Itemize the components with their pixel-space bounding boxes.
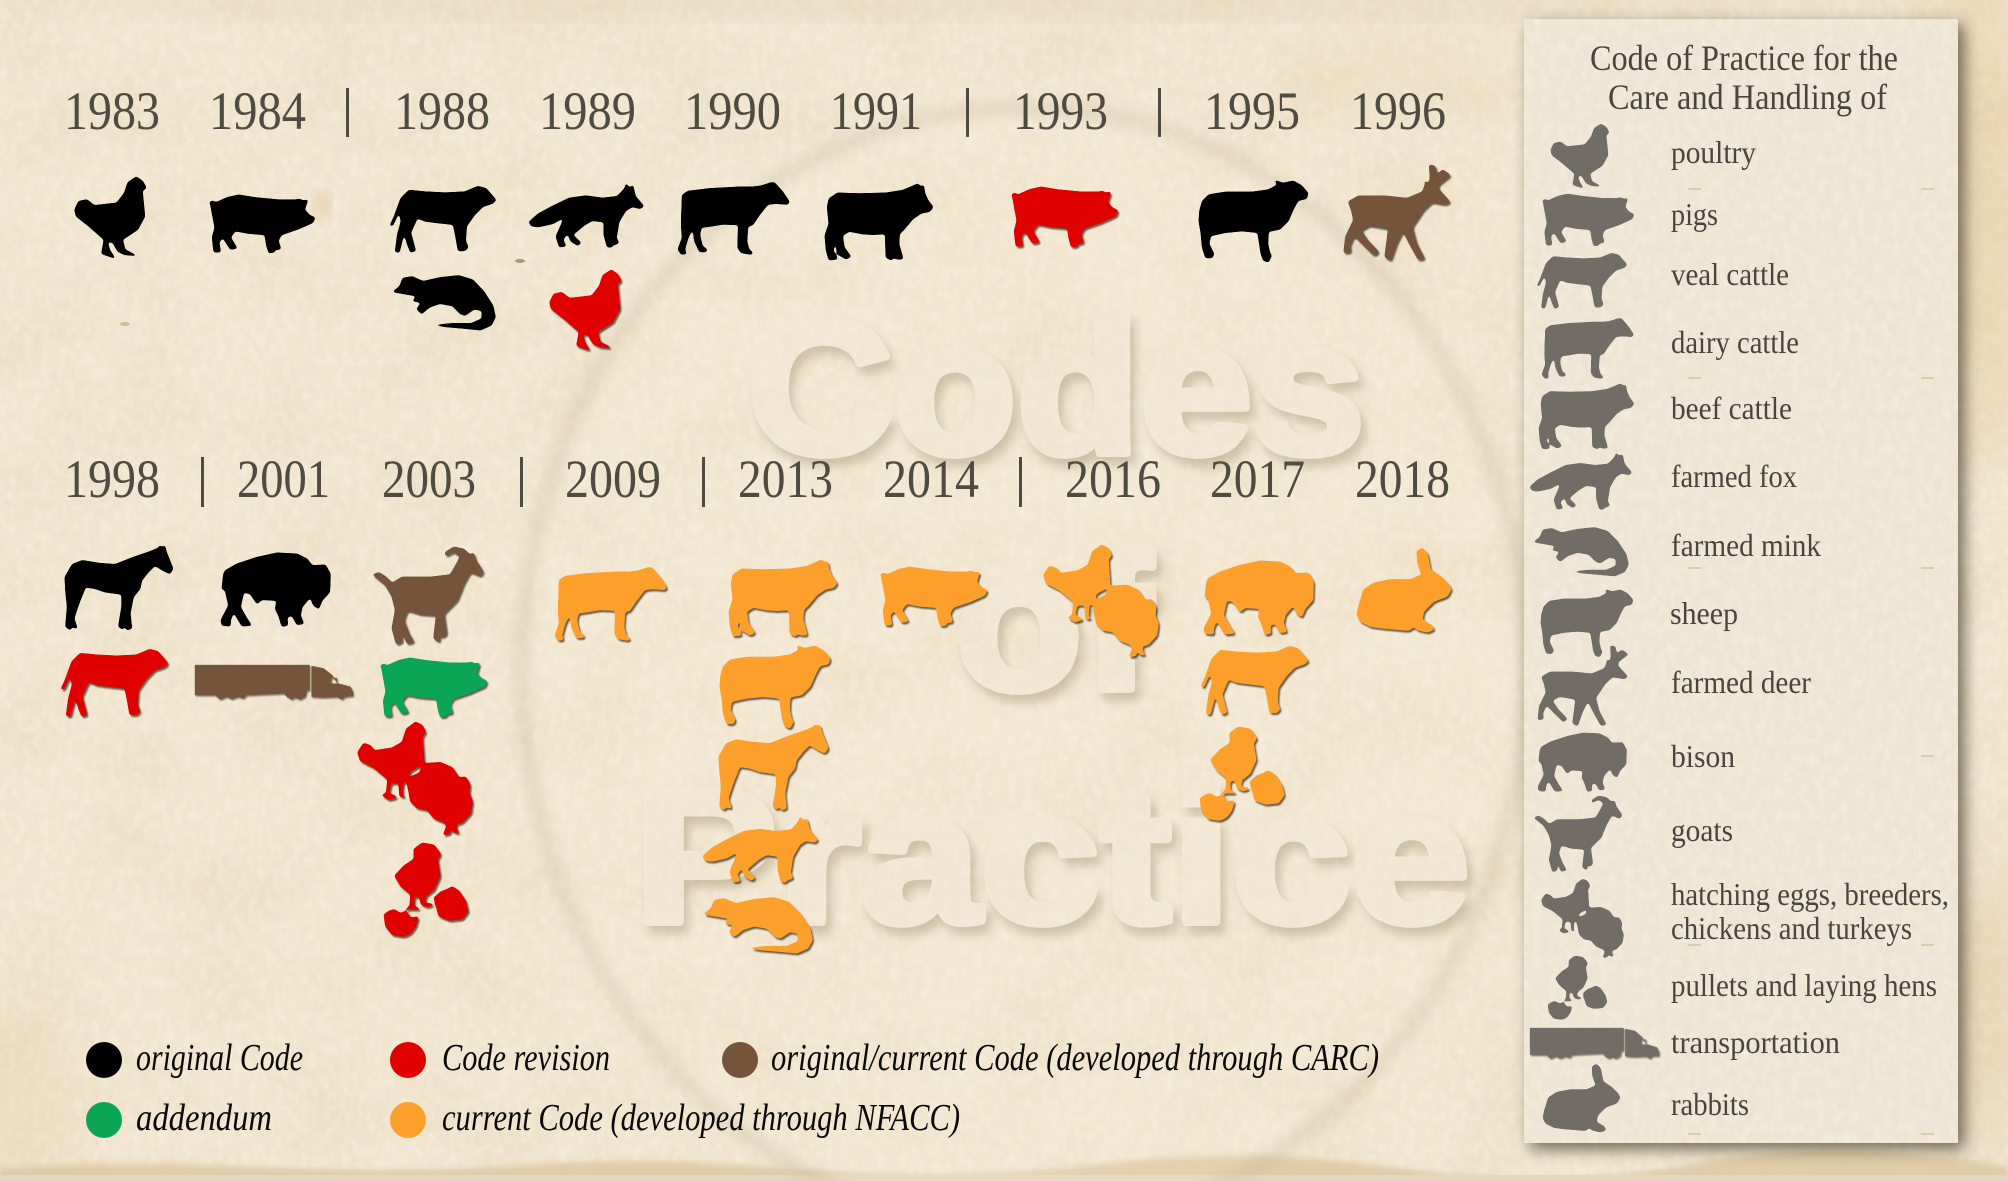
year 1996: 1996	[1350, 81, 1446, 141]
icon: bison 2017	[1204, 561, 1313, 634]
watermark title: Codes of Practice	[634, 282, 1470, 963]
icon: farmed mink 2013	[704, 898, 812, 953]
panel heading: Code of Practice for the	[1590, 38, 1898, 78]
icon: horse 1998	[65, 545, 173, 630]
icon: farmed deer 1996	[1344, 165, 1450, 260]
icon: transportation 2001	[195, 665, 353, 699]
icon: poultry 1983	[75, 177, 146, 258]
year 2016: 2016	[1065, 449, 1161, 509]
icon: pullets revision 2003	[384, 843, 468, 936]
key icon: rabbits	[1543, 1064, 1620, 1132]
key label: rabbits: rabbits	[1671, 1086, 1749, 1122]
icon: veal revision 1998	[61, 649, 168, 716]
icon: horse 2013	[719, 724, 828, 810]
key icon: goats	[1534, 796, 1622, 872]
icon: pig 2014	[881, 567, 987, 626]
watermark circle	[522, 108, 1526, 1181]
icon: farmed mink 1988	[393, 276, 495, 330]
panel heading: Care and Handling of	[1608, 77, 1887, 117]
year 1983: 1983	[64, 81, 160, 141]
legend item: original/current Code: original/current Code (developed through CARC)	[771, 1037, 1379, 1079]
key label: hatching eggs, breeders, chickens and turkeys: hatching eggs, breeders,	[1671, 876, 1949, 912]
key icon: pigs	[1543, 194, 1634, 246]
icon: pig 1984	[210, 195, 315, 253]
year 1993: 1993	[1013, 81, 1108, 141]
year 1989: 1989	[539, 81, 636, 141]
year 2017: 2017	[1210, 449, 1305, 509]
year 2009: 2009	[565, 449, 661, 509]
key icon: veal cattle	[1537, 253, 1627, 308]
icon: goat 2003	[373, 547, 483, 644]
year 1998: 1998	[64, 449, 160, 509]
key label: pullets and laying hens: pullets and laying hens	[1671, 967, 1937, 1003]
icon: veal cattle 1988	[390, 186, 496, 252]
icon: veal cattle 2017	[1201, 646, 1308, 714]
key label: pigs: pigs	[1671, 196, 1718, 232]
key label: beef cattle: beef cattle	[1671, 390, 1792, 426]
key icon: sheep	[1541, 589, 1633, 657]
key label: veal cattle: veal cattle	[1671, 256, 1789, 292]
key label: hatching eggs, breeders, chickens and turkeys	[1671, 876, 1949, 946]
icon: hatching eggs revision 2003	[358, 722, 472, 835]
year 2014: 2014	[883, 449, 979, 509]
key icon: hatching eggs	[1541, 879, 1624, 958]
watermark title: Codes of Practice: of	[955, 514, 1152, 731]
legend item: original Code	[86, 1037, 303, 1079]
icon: pig revision 1993	[1012, 187, 1118, 247]
icon: sheep 2013	[720, 645, 830, 728]
icon: beef cattle 2013	[729, 560, 837, 636]
icon: bison 2001	[221, 553, 330, 626]
year 1988: 1988	[394, 81, 490, 141]
legend	[86, 1037, 1379, 1139]
icon: dairy cattle 2009	[555, 568, 666, 640]
year 1984: 1984	[209, 81, 306, 141]
icon: poultry revision 1989	[550, 270, 621, 350]
key icon: poultry	[1551, 124, 1609, 188]
panel: code of practice key	[1524, 19, 1958, 1143]
key label: farmed fox: farmed fox	[1671, 458, 1797, 494]
key icon: bison	[1538, 733, 1626, 791]
legend item: current Code: current Code (developed through NFACC)	[442, 1097, 960, 1139]
legend item: Code revision	[390, 1037, 610, 1079]
key icon: dairy cattle	[1542, 319, 1633, 378]
key label: hatching eggs, breeders, chickens and turkeys: chickens and turkeys	[1671, 910, 1912, 946]
icon: pullets 2017	[1200, 727, 1284, 820]
year 2003: 2003	[382, 449, 476, 509]
key label: dairy cattle: dairy cattle	[1671, 324, 1799, 360]
icon: farmed fox 1989	[529, 184, 644, 247]
key label: farmed mink: farmed mink	[1671, 527, 1821, 563]
icon: sheep 1995	[1199, 180, 1308, 262]
year 2013: 2013	[738, 449, 833, 509]
legend item: Code revision: Code revision	[442, 1037, 610, 1079]
key label: goats: goats	[1671, 812, 1733, 848]
year 1995: 1995	[1204, 81, 1300, 141]
key label: sheep: sheep	[1670, 595, 1738, 631]
key icon: beef cattle	[1539, 384, 1634, 449]
key label: farmed deer: farmed deer	[1671, 664, 1811, 700]
panel heading	[1590, 38, 1898, 117]
year 2001: 2001	[237, 449, 330, 509]
year 1990: 1990	[684, 81, 781, 141]
icon: dairy cattle 1990	[678, 183, 789, 254]
key icon: pullets and laying hens	[1548, 956, 1607, 1020]
legend item: addendum	[86, 1097, 272, 1139]
key icon: farmed fox	[1530, 453, 1632, 509]
key label: poultry: poultry	[1671, 134, 1756, 170]
key icon: transportation	[1530, 1028, 1659, 1058]
key icon: farmed deer	[1538, 646, 1628, 726]
icon: beef cattle 1991	[825, 184, 933, 260]
key label: transportation: transportation	[1671, 1024, 1840, 1060]
year 1991: 1991	[830, 81, 922, 141]
icon: pig addendum 2003	[381, 658, 487, 717]
icon: farmed fox 2013	[703, 817, 818, 882]
year 2018: 2018	[1355, 449, 1450, 509]
watermark title: Codes of Practice: Codes	[747, 282, 1365, 494]
legend item: addendum: addendum	[136, 1097, 272, 1139]
watermark title: Codes of Practice: Practice	[634, 751, 1470, 963]
icon: rabbit 2018	[1357, 548, 1451, 632]
legend item: original Code: original Code	[136, 1037, 303, 1079]
key icon: farmed mink	[1534, 528, 1628, 576]
icon: hatching eggs 2016	[1044, 545, 1158, 657]
key label: bison: bison	[1671, 738, 1735, 774]
